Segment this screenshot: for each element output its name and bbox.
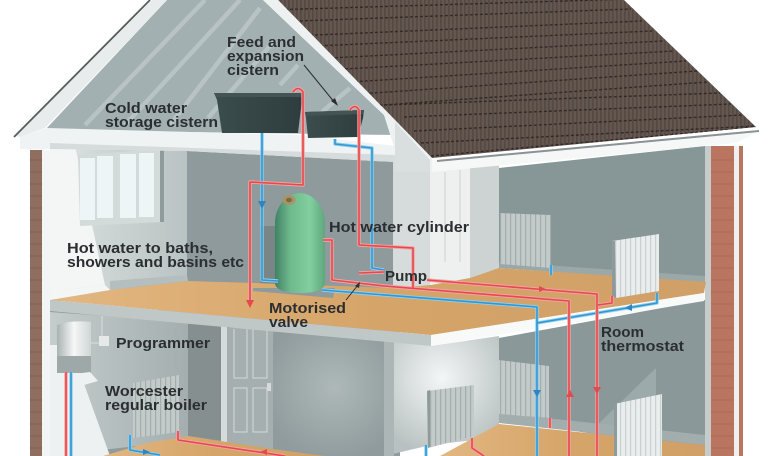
- panel: upper right room: [499, 146, 711, 301]
- radiator: lower column: [427, 385, 474, 448]
- label: feed and expansion cistern: Feed and: [227, 35, 296, 51]
- panel: lower right room: [499, 300, 711, 456]
- panel: left brick wall: [30, 150, 50, 456]
- radiator: lower back: [499, 360, 549, 418]
- label: hot water to baths: Hot water to baths,: [67, 241, 213, 257]
- panel: upper floor: [50, 268, 706, 346]
- label: cold water storage cistern: Cold water: [105, 101, 187, 117]
- panel: eaves fascia: [432, 130, 760, 172]
- label: programmer: Programmer: [116, 336, 210, 352]
- label: hot water to baths: showers and basins etc: [67, 255, 244, 271]
- cylinder alcove: [260, 226, 280, 288]
- label: motorised valve: Motorised: [269, 301, 346, 317]
- label: room thermostat: Room: [601, 325, 644, 341]
- radiator: lower left: [133, 375, 179, 438]
- panel: lower floor: [103, 424, 705, 456]
- icon: cold water storage cistern: [214, 93, 302, 133]
- panel: lower room: [50, 310, 400, 456]
- window: [78, 149, 164, 226]
- cylinder platform: [253, 288, 335, 298]
- label: motorised valve: valve: [269, 315, 308, 331]
- label: feed and expansion cistern: expansion: [227, 49, 304, 65]
- label: room thermostat: thermostat: [601, 339, 684, 355]
- icon: programmer: [91, 316, 109, 346]
- label: cold water storage cistern: storage cistern: [105, 115, 218, 131]
- icon: boiler: [57, 321, 98, 385]
- label: worcester regular boiler: regular boiler: [105, 398, 207, 414]
- label: pump: Pump: [385, 269, 427, 285]
- radiator: upper right: [612, 234, 659, 298]
- radiator: upper back: [500, 213, 551, 268]
- icon: hot water cylinder: [275, 193, 325, 293]
- icon: feed and expansion cistern: [305, 110, 364, 138]
- door: [221, 326, 273, 450]
- red flow pipes: [66, 88, 612, 456]
- panel: roof: [270, 0, 757, 158]
- blue flow pipes: [71, 133, 657, 456]
- pointer arrow: feed cistern: [304, 65, 338, 106]
- panel: upper room: [50, 146, 395, 301]
- panel: lower column: [384, 336, 499, 456]
- flow arrows: [143, 201, 632, 455]
- label: hot water cylinder: Hot water cylinder: [329, 220, 469, 236]
- panel: ceiling beam: [20, 128, 395, 162]
- pointer arrow: motorised valve: [346, 282, 360, 300]
- panel: upper column and landing door: [393, 150, 499, 290]
- panel: attic gable: [45, 0, 395, 135]
- label: feed and expansion cistern: cistern: [227, 63, 279, 79]
- panel: right brick wall: [711, 146, 743, 456]
- label: worcester regular boiler: Worcester: [105, 384, 183, 400]
- panel: gable barge boards: [14, 0, 432, 172]
- radiator: lower right: [614, 394, 662, 456]
